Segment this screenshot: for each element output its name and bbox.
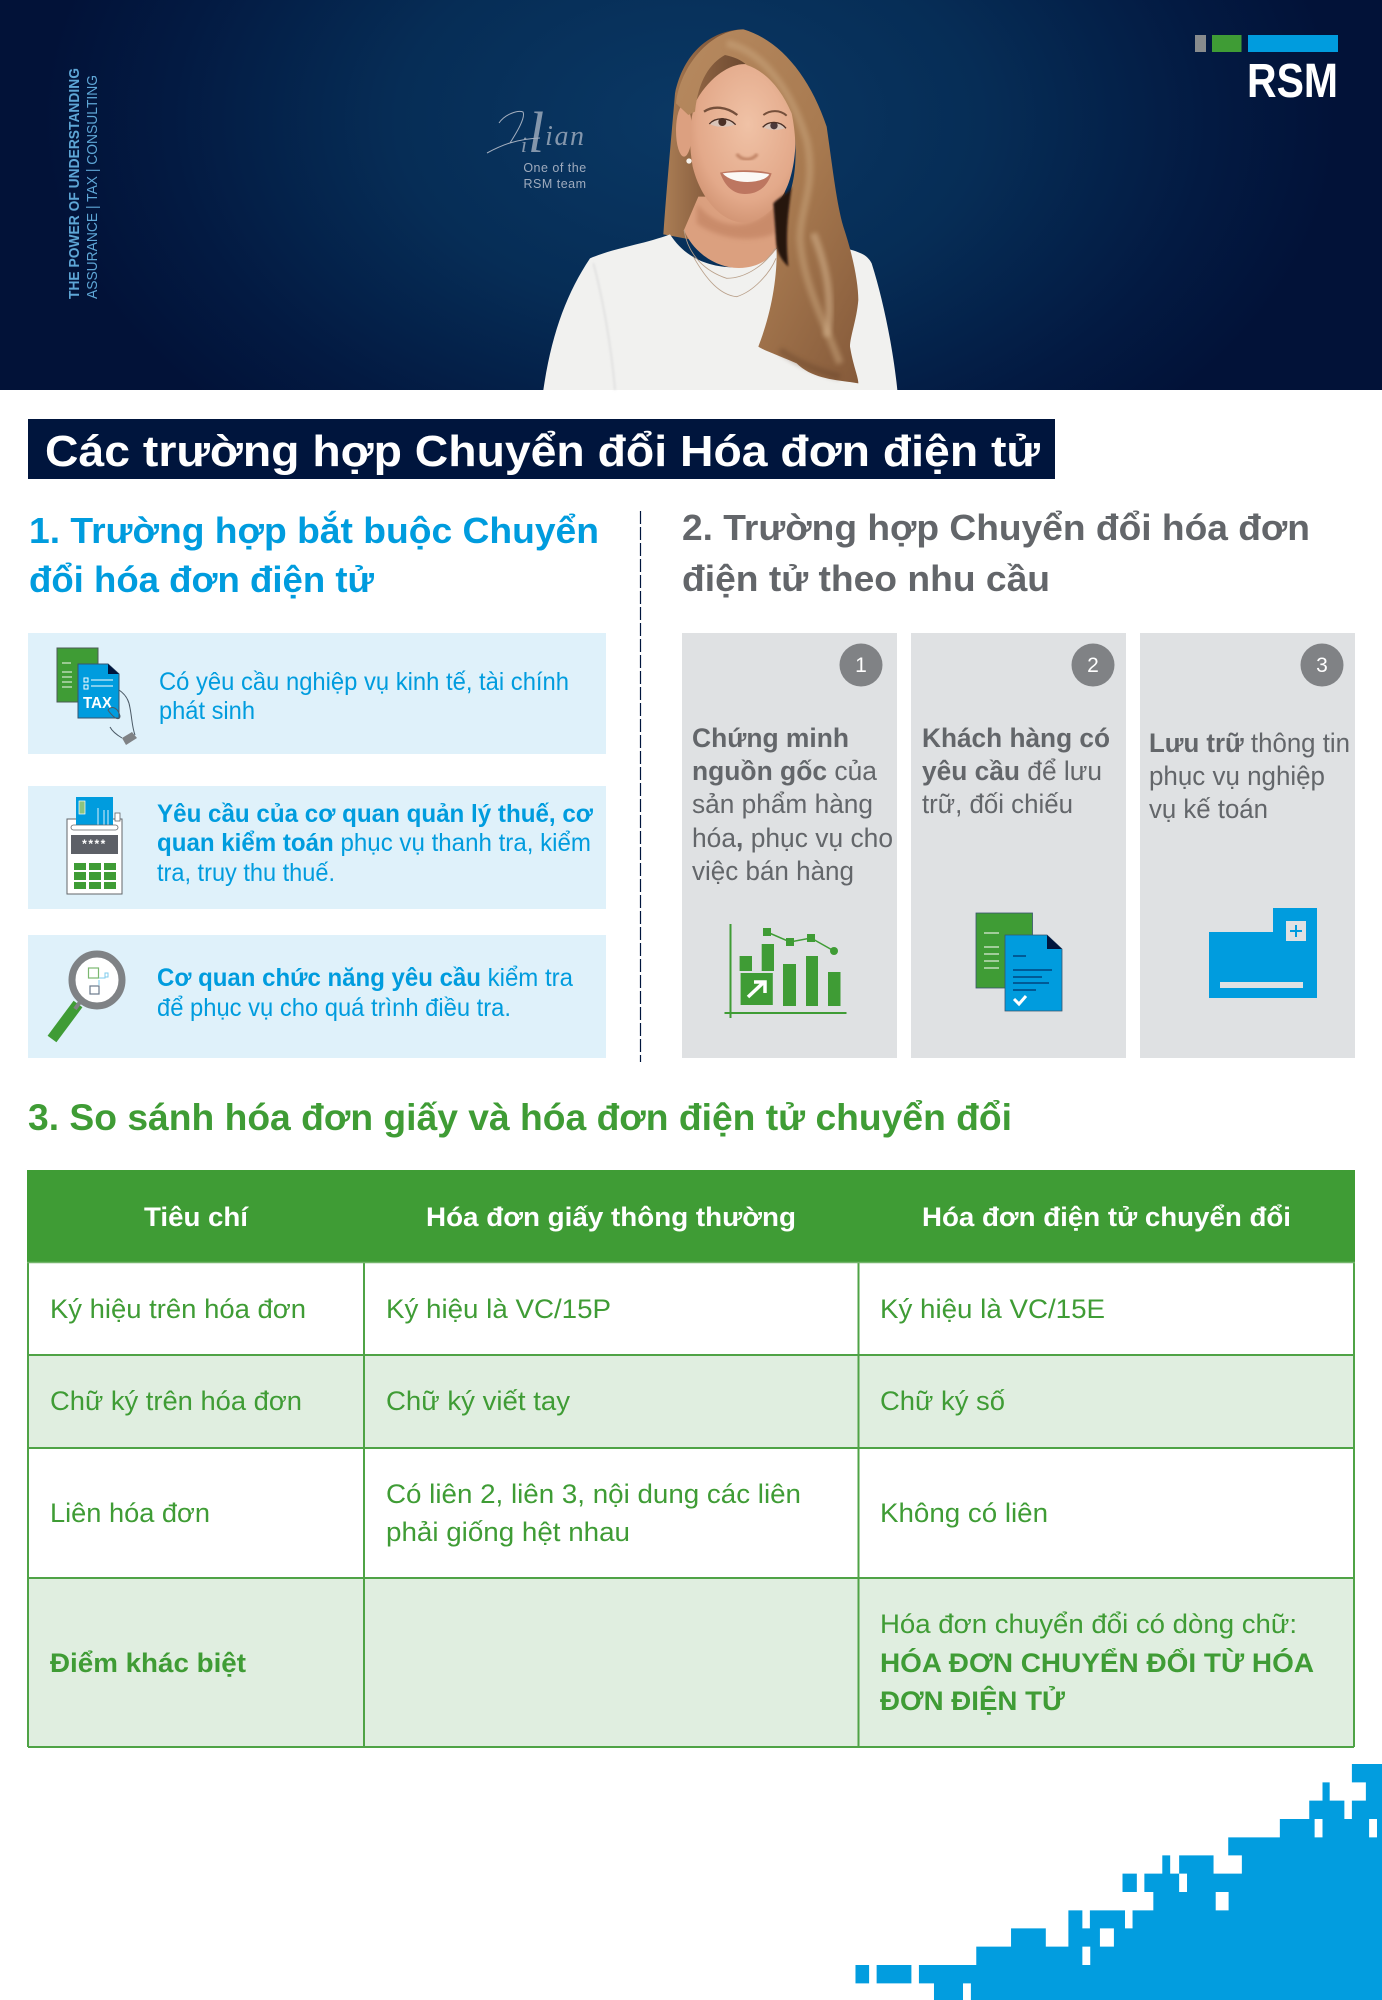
icon: tax documents with hand — [57, 648, 137, 745]
tagline vertical text: ASSURANCE | TAX | CONSULTING — [84, 75, 101, 299]
RSM logo — [1195, 35, 1338, 108]
icon: bar chart with arrow — [724, 924, 846, 1018]
row: difference: Hóa đơn chuyển đổi có dòng chữ: — [880, 1609, 1297, 1639]
panel: on-demand card 3: phục vụ nghiệp — [1149, 761, 1325, 791]
row: invoice symbol: Ký hiệu là VC/15E — [880, 1294, 1105, 1324]
heading: section 2 — [682, 507, 1310, 599]
row: invoice copies: Có liên 2, liên 3, nội dung các liên — [386, 1479, 801, 1509]
row: invoice copies — [50, 1479, 1048, 1547]
panel: mandatory case 2: Yêu cầu của cơ quan quản lý thuế, cơ — [157, 800, 593, 828]
tagline vertical text: THE POWER OF UNDERSTANDING — [66, 68, 83, 299]
row: difference: HÓA ĐƠN CHUYỂN ĐỔI TỪ HÓA — [880, 1647, 1314, 1678]
panel: on-demand card 2 — [911, 633, 1126, 1058]
header banner — [0, 0, 1382, 390]
badge 3: 3 — [1316, 654, 1328, 677]
panel: on-demand card 1: hóa, phục vụ cho — [692, 823, 893, 853]
row: invoice copies: Liên hóa đơn — [50, 1498, 210, 1528]
row: invoice symbol — [50, 1294, 1105, 1324]
panel: on-demand card 1 — [682, 633, 897, 1058]
badge 2 — [1072, 644, 1114, 686]
panel: mandatory case 1: Có yêu cầu nghiệp vụ kinh tế, tài chính — [159, 668, 569, 696]
panel: on-demand card 3 — [1140, 633, 1355, 1058]
badge 1 — [840, 644, 882, 686]
table header: Tiêu chí — [144, 1202, 250, 1232]
badge 2: 2 — [1087, 654, 1099, 677]
panel: on-demand card 3: Lưu trữ thông tin — [1149, 728, 1350, 758]
signature — [487, 100, 587, 191]
heading: section 1: đổi hóa đơn điện tử — [29, 559, 375, 600]
panel: mandatory case 1 — [28, 633, 606, 754]
row: difference: ĐƠN ĐIỆN TỬ — [880, 1684, 1066, 1716]
tagline vertical text — [66, 68, 101, 299]
signature: ian — [545, 121, 585, 152]
panel: mandatory case 2: quan kiểm toán phục vụ thanh tra, kiểm — [157, 829, 591, 857]
signature: One of the — [523, 161, 587, 175]
signature: RSM team — [523, 177, 587, 191]
heading: section 3: 3. So sánh hóa đơn giấy và hóa đơn điện tử chuyển đổi — [28, 1097, 1012, 1138]
table header — [27, 1170, 1355, 1262]
icon: magnifier — [52, 954, 122, 1039]
panel: on-demand card 2: trữ, đối chiếu — [922, 789, 1073, 819]
icon: folder — [1209, 908, 1317, 998]
row: invoice symbol: Ký hiệu trên hóa đơn — [50, 1294, 306, 1324]
badge 3 — [1300, 644, 1344, 686]
panel: on-demand card 1: việc bán hàng — [692, 856, 854, 886]
panel: mandatory case 2 — [28, 786, 606, 909]
icon: tax documents with hand: TAX — [83, 695, 112, 712]
row: difference — [50, 1609, 1314, 1716]
badge 1: 1 — [855, 654, 867, 677]
panel: on-demand card 1: Chứng minh — [692, 723, 849, 753]
panel: on-demand card 1: nguồn gốc của — [692, 756, 878, 786]
panel: mandatory case 2: tra, truy thu thuế. — [157, 859, 335, 887]
table header: Hóa đơn giấy thông thường — [426, 1202, 796, 1232]
comparison table — [27, 1170, 1355, 1747]
heading: section 1: 1. Trường hợp bắt buộc Chuyển — [29, 509, 599, 551]
portrait — [543, 29, 897, 390]
icon: card terminal — [67, 797, 122, 894]
pixel staircase decoration — [855, 1764, 1382, 2000]
row: signature: Chữ ký trên hóa đơn — [50, 1386, 302, 1416]
signature: Lil — [500, 100, 544, 165]
panel: on-demand card 1: sản phẩm hàng — [692, 789, 873, 819]
heading: section 1 — [29, 509, 599, 600]
heading: section 2: 2. Trường hợp Chuyển đổi hóa đơn — [682, 507, 1310, 548]
title: Các trường hợp Chuyển đổi Hóa đơn điện tử — [45, 427, 1040, 476]
RSM logo: RSM — [1247, 55, 1338, 108]
icon: documents with check — [976, 913, 1062, 1011]
panel: mandatory case 1: phát sinh — [159, 697, 255, 725]
row: invoice symbol: Ký hiệu là VC/15P — [386, 1294, 611, 1324]
panel: mandatory case 3: để phục vụ cho quá trình điều tra. — [157, 994, 511, 1022]
panel: on-demand card 2: yêu cầu để lưu — [922, 756, 1102, 786]
row: signature: Chữ ký viết tay — [386, 1386, 570, 1416]
panel: mandatory case 3: Cơ quan chức năng yêu cầu kiểm tra — [157, 964, 573, 992]
row: invoice copies: phải giống hệt nhau — [386, 1517, 630, 1547]
row: difference: Điểm khác biệt — [50, 1648, 246, 1678]
heading: section 2: điện tử theo nhu cầu — [682, 558, 1050, 599]
row: signature — [50, 1386, 1005, 1416]
row: signature: Chữ ký số — [880, 1386, 1005, 1416]
icon: card terminal: **** — [82, 837, 107, 851]
row: invoice copies: Không có liên — [880, 1498, 1048, 1528]
panel: on-demand card 3: vụ kế toán — [1149, 794, 1268, 824]
panel: mandatory case 3 — [28, 935, 606, 1058]
table header: Hóa đơn điện tử chuyển đổi — [922, 1202, 1291, 1232]
panel: on-demand card 2: Khách hàng có — [922, 723, 1110, 753]
